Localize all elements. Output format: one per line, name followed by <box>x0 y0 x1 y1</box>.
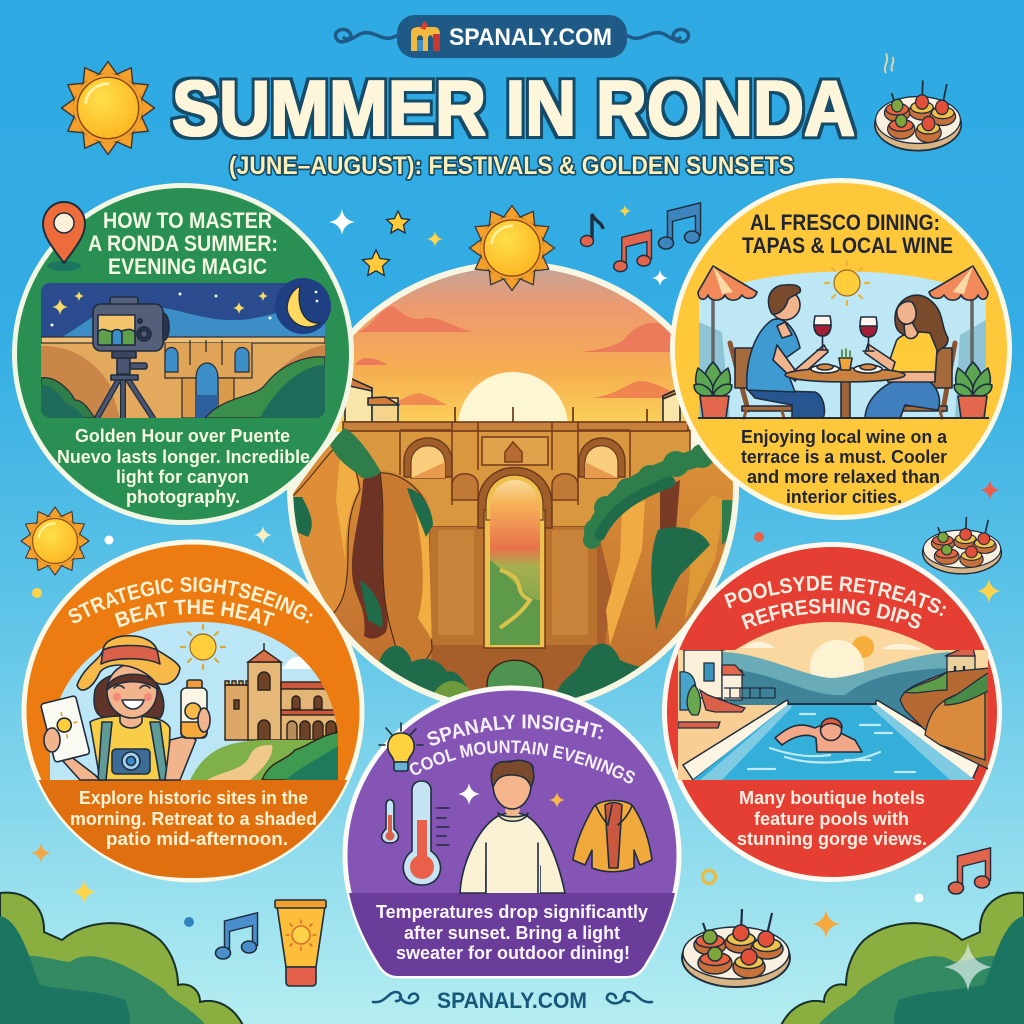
central arch <box>478 468 552 528</box>
body text: patio mid-afternoon. <box>106 828 288 849</box>
side arches <box>404 438 452 477</box>
body text: Enjoying local wine on a <box>741 426 948 447</box>
sunset sky <box>335 270 692 432</box>
icon: sun left <box>21 507 89 575</box>
body text: terrace is a must. Cooler <box>741 446 947 467</box>
body text: Golden Hour over Puente <box>75 425 290 446</box>
moon <box>275 278 331 334</box>
banner text: SPANALY.COM <box>449 24 612 51</box>
panel: hero Puente Nuevo <box>285 261 745 725</box>
panel: beat the heat <box>22 540 364 882</box>
icon: map pin <box>43 202 85 271</box>
footer flourishes <box>373 992 652 1003</box>
body text: morning. Retreat to a shaded <box>70 808 317 829</box>
body text: stunning gorge views. <box>737 828 927 849</box>
illustration: camera on tripod at bridge <box>41 283 325 418</box>
back canyon <box>428 530 612 692</box>
heading <box>88 208 278 279</box>
town buildings <box>345 379 680 422</box>
bridge <box>343 407 690 670</box>
heading: HOW TO MASTER <box>103 208 272 233</box>
body text: photography. <box>126 486 240 507</box>
banner pill <box>397 15 627 58</box>
heading <box>410 714 635 784</box>
left cliffs <box>293 428 433 662</box>
body text: sweater for outdoor dining! <box>396 942 630 963</box>
heading: AL FRESCO DINING: <box>750 210 940 235</box>
wine glasses <box>814 316 877 351</box>
panel: poolside retreats <box>662 542 1002 882</box>
right cliffs <box>583 444 733 666</box>
person in sweater <box>460 760 565 893</box>
illustration: tourist and castle <box>41 622 340 780</box>
body text <box>376 901 649 963</box>
body text: Many boutique hotels <box>739 787 925 808</box>
tourist <box>41 636 210 780</box>
body text: and more relaxed than <box>747 466 940 487</box>
icon: sun top left <box>61 61 154 154</box>
heading: BEAT THE HEAT <box>114 600 275 628</box>
panel: evening magic <box>14 186 352 522</box>
plants <box>694 362 992 418</box>
body text: Temperatures drop significantly <box>376 901 649 922</box>
heading: COOL MOUNTAIN EVENINGS <box>410 740 635 784</box>
icon: tapas plate right <box>923 517 1001 574</box>
illustration: infinity pool <box>678 620 990 780</box>
body text <box>737 787 927 849</box>
title: SUMMER IN RONDA <box>172 64 855 152</box>
bushes bottom right <box>779 893 1024 1024</box>
panel: al fresco dining <box>672 180 1010 518</box>
cliffs and tower <box>900 644 990 770</box>
body text: feature pools with <box>754 808 909 829</box>
clouds <box>355 306 700 405</box>
subtitle: (JUNE–AUGUST): FESTIVALS & GOLDEN SUNSETS <box>229 152 794 180</box>
setting sun <box>458 372 568 422</box>
icon: sun over hero <box>470 206 554 290</box>
body text <box>70 787 317 849</box>
icon: sunscreen tube <box>275 900 326 986</box>
swimmer <box>775 718 862 752</box>
panel: spanaly insight <box>342 686 682 978</box>
logo banner <box>336 15 688 58</box>
sparkle on bush <box>944 943 992 991</box>
body text <box>57 425 310 507</box>
heading: TAPAS & LOCAL WINE <box>742 233 953 258</box>
decorative sparkles and stars <box>31 205 1001 938</box>
icon: tapas plate bottom <box>682 909 790 987</box>
camera <box>93 297 169 351</box>
icon: jacket <box>573 800 652 872</box>
umbrellas <box>698 266 988 362</box>
heading: REFRESHING DIPS <box>741 598 922 630</box>
body text: after sunset. Bring a light <box>404 922 620 943</box>
sparkles <box>458 783 565 808</box>
terrace sun <box>825 261 869 305</box>
bushes bottom left <box>0 893 245 1024</box>
footer text: SPANALY.COM <box>437 988 587 1013</box>
icon: light bulb <box>379 723 423 771</box>
heading: POOLSYDE RETREATS: <box>724 576 946 616</box>
hill and bush <box>190 740 314 780</box>
lamp posts <box>455 407 647 422</box>
body text: Nuevo lasts longer. Incredible <box>57 446 310 467</box>
icon: thermometers <box>382 781 449 885</box>
chairs <box>730 343 955 418</box>
body text <box>741 426 948 507</box>
table <box>785 349 905 418</box>
heading: A RONDA SUMMER: <box>88 231 278 256</box>
heading: EVENING MAGIC <box>108 254 267 279</box>
castle <box>225 643 337 740</box>
icon: tapas plate top right <box>875 53 961 151</box>
icons: music notes <box>216 206 990 959</box>
heading: STRATEGIC SIGHTSEEING: <box>68 577 313 624</box>
heat sun <box>181 625 225 669</box>
villa <box>678 650 776 729</box>
woman <box>865 295 948 418</box>
logo mark <box>411 21 440 51</box>
heading: SPANALY INSIGHT: <box>427 714 604 746</box>
illustration: couple on terrace <box>694 261 992 418</box>
banner flourishes <box>336 29 688 42</box>
body text: Explore historic sites in the <box>79 787 308 808</box>
heading <box>742 210 953 258</box>
body text: light for canyon <box>116 466 249 487</box>
gorge trees <box>379 644 640 698</box>
man <box>747 285 828 418</box>
body text: interior cities. <box>786 486 902 507</box>
footer brand <box>373 988 652 1013</box>
